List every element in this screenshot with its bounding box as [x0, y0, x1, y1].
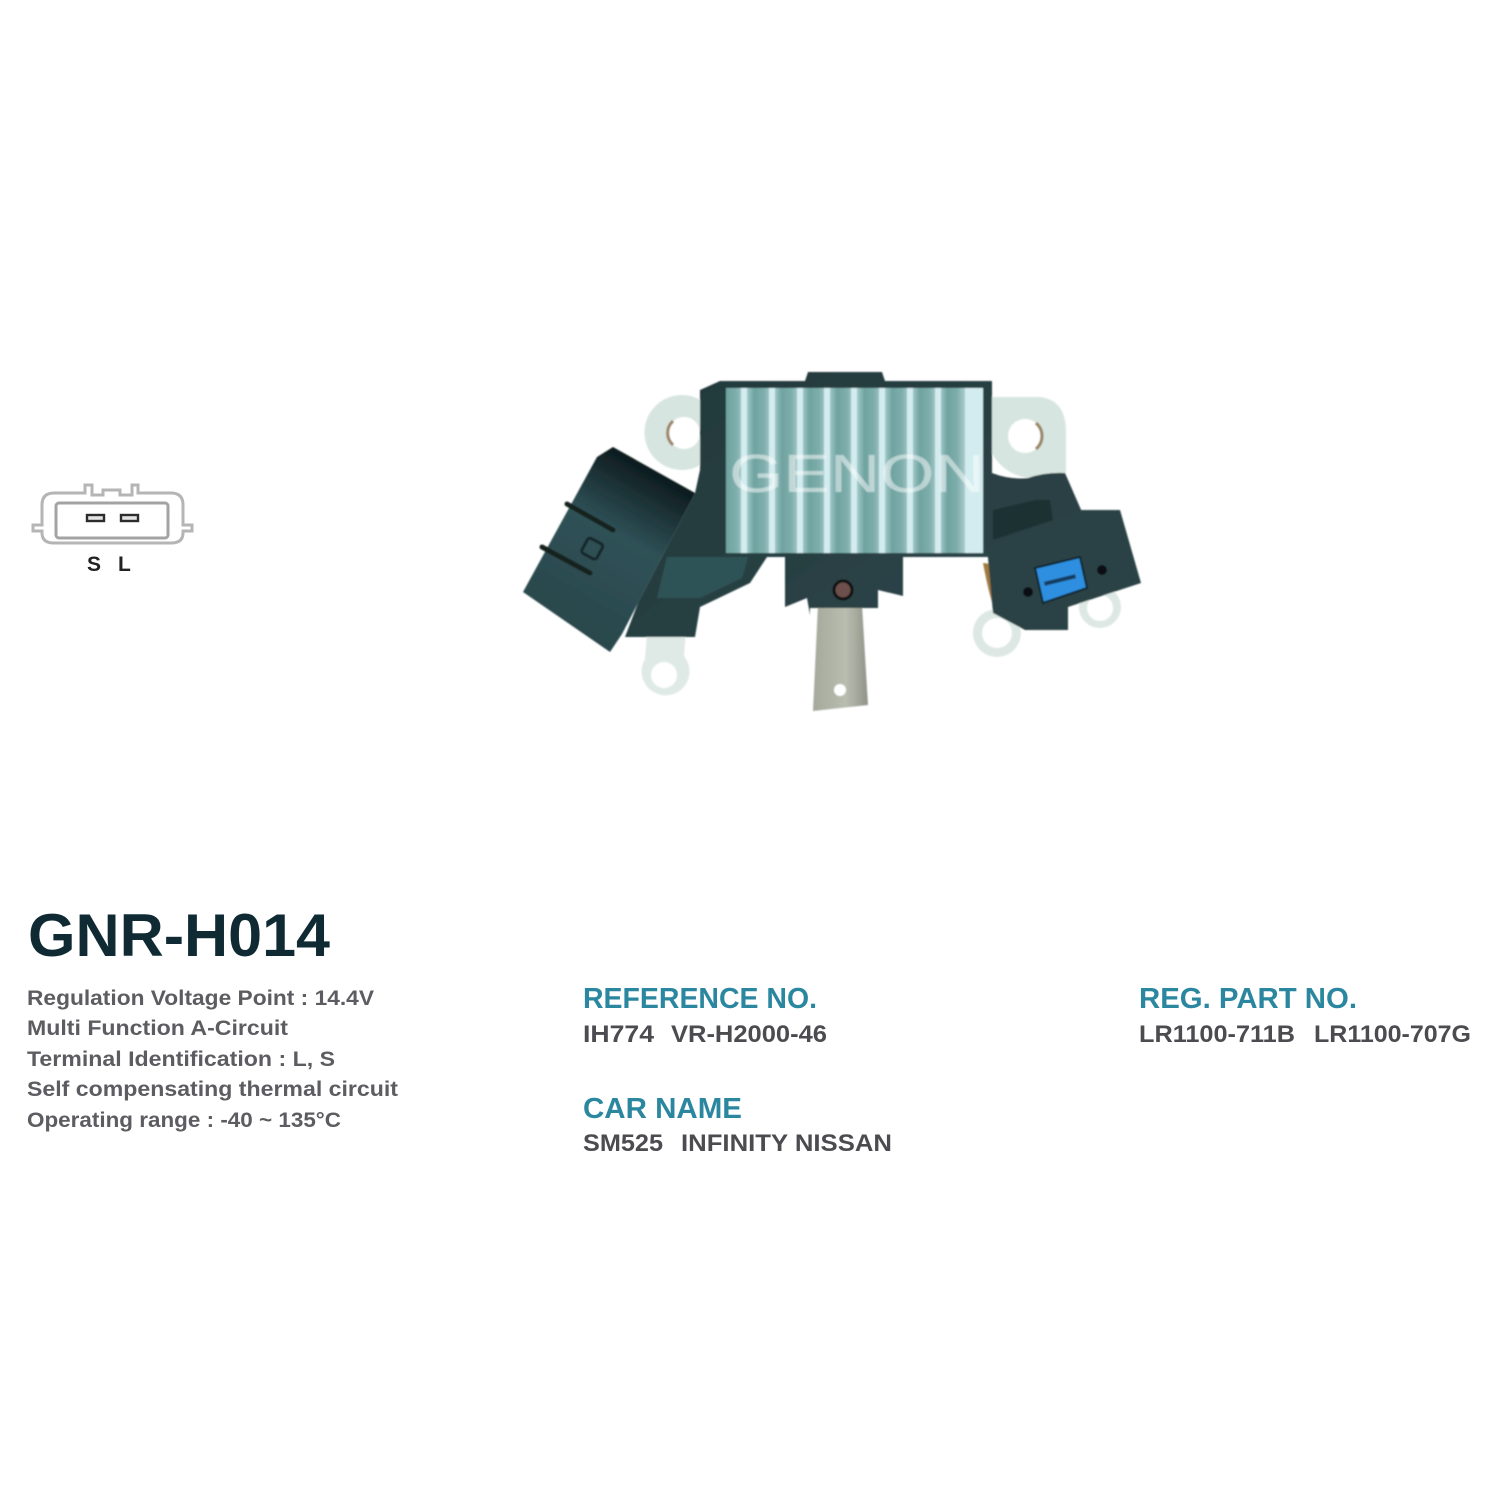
plug latch square — [581, 537, 604, 560]
car name values: SM525 — [583, 1130, 663, 1157]
plug ridge lower — [542, 547, 590, 573]
right housing upper — [986, 473, 1082, 550]
reference values: IH774 — [583, 1021, 655, 1048]
right mounting tab — [990, 397, 1066, 478]
car name block — [583, 1093, 892, 1157]
left tab hole rim — [668, 421, 673, 445]
part number title: GNR-H014 — [28, 902, 331, 969]
specification list: Regulation Voltage Point : 14.4V — [27, 987, 374, 1010]
right housing notch shadow — [993, 500, 1053, 540]
car name values: INFINITY NISSAN — [681, 1130, 892, 1157]
screw on terminal block — [834, 581, 852, 599]
specification list: Self compensating thermal circuit — [27, 1078, 398, 1101]
reference values — [583, 1021, 827, 1048]
blue adjuster label — [1035, 557, 1087, 603]
lower left housing highlight — [657, 557, 748, 598]
product photo: voltage regulator — [523, 372, 1141, 711]
terminal pin S — [87, 515, 104, 521]
left mounting tab — [644, 395, 719, 470]
regulator part values — [1139, 1021, 1471, 1048]
lower left mounting ring — [642, 632, 690, 695]
terminal label L: L — [118, 553, 131, 576]
plate hole — [834, 684, 846, 696]
specification list: Terminal Identification : L, S — [27, 1048, 335, 1071]
left plug connector — [523, 447, 695, 652]
reference values: VR-H2000-46 — [671, 1021, 827, 1048]
connector hole right — [1097, 565, 1107, 575]
specification list: Operating range : -40 ~ 135°C — [27, 1109, 341, 1132]
terminal pin L — [121, 515, 138, 521]
blue label mark — [1044, 574, 1076, 586]
connector inner socket — [56, 503, 168, 538]
reference heading: REFERENCE NO. — [583, 983, 817, 1015]
specification list — [27, 987, 398, 1132]
reference number block — [583, 983, 827, 1048]
regulator part values: LR1100-711B — [1139, 1021, 1295, 1048]
regulator part number block — [1139, 983, 1471, 1048]
right connector amber edge — [983, 563, 1010, 613]
car name values — [583, 1130, 892, 1157]
connector hole left — [1023, 587, 1033, 597]
brush holder metal plate — [813, 605, 868, 711]
connector terminal diagram — [33, 485, 192, 576]
regulator part values: LR1100-707G — [1314, 1021, 1471, 1048]
heat sink base — [726, 388, 983, 553]
main dark housing — [625, 372, 992, 637]
terminal label S: S — [87, 553, 101, 576]
watermark: GENON: GENON — [729, 444, 985, 504]
right tab hole rim — [1036, 423, 1042, 449]
heat sink fins — [741, 388, 983, 553]
lower right mounting rings — [973, 586, 1121, 657]
car name heading: CAR NAME — [583, 1093, 742, 1125]
right connector block — [987, 510, 1141, 630]
plug ridge upper — [567, 504, 613, 530]
regulator part heading: REG. PART NO. — [1139, 983, 1357, 1015]
specification list: Multi Function A-Circuit — [27, 1017, 288, 1040]
connector housing outline — [33, 485, 192, 543]
